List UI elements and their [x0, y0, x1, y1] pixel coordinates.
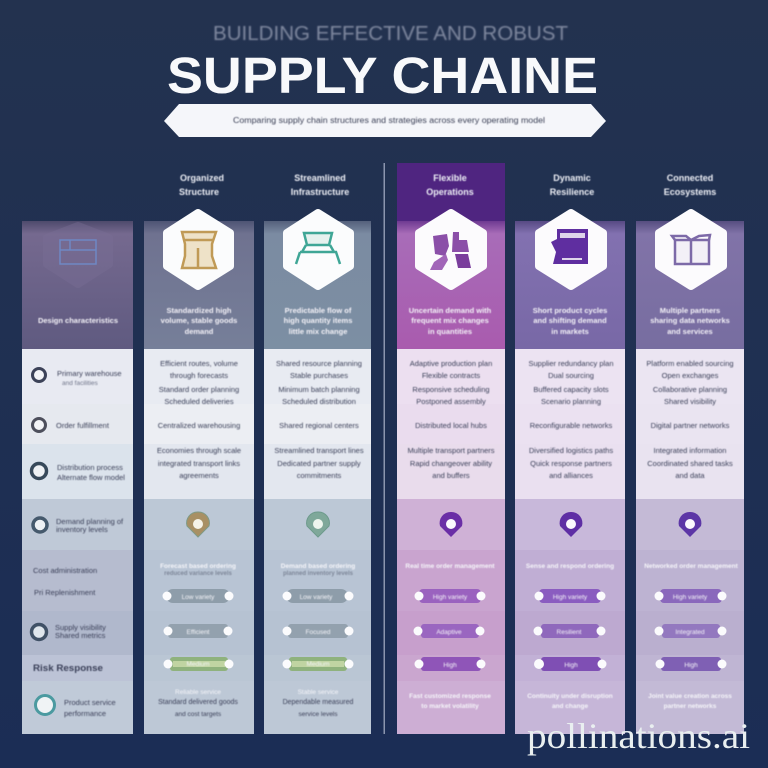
row 4 label: inventory levels: [56, 525, 108, 534]
row 1 text: through forecasts: [170, 371, 228, 380]
icon: puzzle pieces: [430, 232, 471, 270]
row 1 text: Platform enabled sourcing: [646, 359, 734, 368]
header description: Predictable flow of: [285, 306, 351, 315]
column heading: Ecosystems: [664, 187, 716, 197]
pill: row 5: [282, 589, 354, 603]
row 1 text: Shared visibility: [664, 397, 716, 406]
row 5 text: planned inventory levels: [283, 571, 354, 577]
column heading: Infrastructure: [291, 187, 349, 197]
row 1 text: Scenario planning: [541, 397, 601, 406]
header description: Uncertain demand with: [409, 306, 491, 315]
watermark: pollinations.ai: [527, 716, 750, 756]
column: option 5: [636, 173, 744, 734]
row 8 note: and cost targets: [175, 711, 222, 718]
icon: cart: [296, 233, 340, 264]
pill: row 7: [282, 657, 354, 671]
header description: frequent mix changes: [411, 316, 489, 325]
icon: ghost crate: [60, 240, 96, 264]
icon: status marker: [440, 512, 462, 537]
row 5 text: reduced variance levels: [164, 571, 233, 577]
row 1 label: and facilities: [62, 380, 99, 387]
main title: SUPPLY CHAINE: [167, 47, 598, 104]
row 8 text: Fast customized response: [409, 693, 491, 700]
row 1 text: Standard order planning: [159, 385, 239, 394]
row 1 text: Dual sourcing: [548, 371, 594, 380]
header panel: [397, 221, 505, 349]
row 1 text: Supplier redundancy plan: [528, 359, 614, 368]
pill: row 7: [414, 657, 486, 671]
header description: high quantity items: [284, 316, 352, 325]
row 8 label: performance: [64, 709, 106, 718]
row 8 text: partner networks: [664, 703, 717, 710]
header panel: [636, 221, 744, 349]
row 5 text: Real time order management: [405, 563, 495, 570]
pill: row 6: Efficient: [186, 629, 210, 636]
row 5 text: Networked order management: [644, 563, 739, 570]
row 8 text: Continuity under disruption: [527, 693, 613, 700]
pill: row 5: High variety: [553, 594, 588, 601]
pill: row 5: High variety: [673, 594, 708, 601]
row 8 detail: Standard delivered goods: [158, 699, 238, 706]
row 8 detail: Dependable measured: [283, 699, 354, 706]
row 8 text: and change: [552, 703, 588, 710]
icon: status marker: [187, 512, 209, 537]
row 1 text: Scheduled distribution: [282, 397, 356, 406]
header description: Standardized high: [166, 306, 232, 315]
title block: [164, 23, 606, 137]
icon: open box: [672, 235, 710, 264]
column heading: Structure: [179, 187, 219, 197]
icon: row 1: [32, 368, 46, 382]
row 1 text: Collaborative planning: [653, 385, 727, 394]
row 3 text: agreements: [179, 471, 219, 480]
column heading: Flexible: [433, 173, 467, 183]
pill: row 7: [164, 657, 234, 671]
pill: row 6: Adaptive: [436, 629, 462, 636]
header description: Short product cycles: [533, 306, 607, 315]
row 2 text: Distributed local hubs: [415, 421, 487, 430]
pill: row 7: Medium: [186, 661, 210, 668]
subtitle banner: [164, 104, 606, 137]
pill: row 7: Medium: [306, 661, 330, 668]
header description: demand: [185, 327, 214, 336]
rows background: [397, 349, 505, 734]
pill: row 7: High: [443, 662, 457, 669]
row 8 note: service levels: [298, 711, 338, 718]
pill: row 6: [534, 624, 606, 638]
row 1 text: Responsive scheduling: [412, 385, 490, 394]
row 1 text: Flexible contracts: [422, 371, 480, 380]
pill: row 5: [162, 589, 234, 603]
rows background: [22, 349, 133, 734]
row 1 text: Stable purchases: [290, 371, 348, 380]
row 3 text: and buffers: [432, 471, 470, 480]
row 3 text: Multiple transport partners: [407, 446, 495, 455]
pill: row 7: High: [564, 662, 578, 669]
row 1 text: Scheduled deliveries: [164, 397, 234, 406]
header description: sharing data networks: [650, 316, 730, 325]
row 4 label: Demand planning of: [56, 517, 123, 526]
icon: status marker: [679, 512, 701, 537]
ghost hexagon badge: [47, 226, 109, 284]
icon: status marker: [307, 512, 329, 537]
rows background: [636, 349, 744, 734]
row 1 text: Efficient routes, volume: [160, 359, 238, 368]
header description: volume, stable goods: [161, 316, 237, 325]
header panel: [144, 221, 254, 349]
row 2 text: Reconfigurable networks: [530, 421, 613, 430]
icon: crate: [182, 232, 216, 268]
rows background: [144, 349, 254, 734]
row 1 text: Postponed assembly: [416, 397, 486, 406]
row 3 text: Coordinated shared tasks: [647, 459, 733, 468]
pill: row 5: [414, 589, 486, 603]
pill: row 6: [282, 624, 354, 638]
pill: row 5: Low variety: [300, 594, 333, 601]
row 3 text: Dedicated partner supply: [277, 459, 361, 468]
row 8 label: Product service: [64, 698, 116, 707]
row 3 text: integrated transport links: [158, 459, 240, 468]
pill: row 7: [656, 657, 726, 671]
pill: row 6: [654, 624, 726, 638]
row 3 label: Alternate flow model: [57, 473, 125, 482]
header caption: Design characteristics: [38, 316, 118, 325]
row 3 text: Integrated information: [654, 446, 726, 455]
header description: Multiple partners: [660, 306, 720, 315]
row 1 text: Minimum batch planning: [278, 385, 360, 394]
column heading: Operations: [426, 187, 474, 197]
eyebrow heading: BUILDING EFFECTIVE AND ROBUST: [213, 23, 568, 45]
hexagon badge: [287, 213, 350, 286]
column heading: Dynamic: [553, 173, 591, 183]
row 6 label: Shared metrics: [55, 631, 106, 640]
row 2 label: Order fulfillment: [56, 421, 110, 430]
header panel: [515, 221, 625, 349]
header description: little mix change: [289, 327, 347, 336]
icon: row 6: [32, 624, 46, 640]
column: option 3 (highlighted): [397, 163, 505, 734]
center divider: [384, 163, 385, 734]
row 8 text: Reliable service: [175, 689, 221, 696]
row 3 text: and alliances: [549, 471, 593, 480]
pill: row 6: Focused: [306, 629, 331, 636]
pill: row 5: High variety: [433, 594, 468, 601]
pill: row 5: [654, 589, 726, 603]
icon: row 4: [33, 518, 47, 532]
hexagon badge: [659, 213, 723, 286]
row 1 text: Adaptive production plan: [410, 359, 492, 368]
icon: status marker: [560, 512, 582, 537]
row 7 label: Risk Response: [33, 663, 103, 674]
row 3 text: Streamlined transport lines: [274, 446, 364, 455]
icon: row 8: [36, 696, 54, 714]
pill: row 6: [414, 624, 484, 638]
column: option 4: [515, 173, 625, 734]
header description: in markets: [551, 327, 589, 336]
row 8 text: Joint value creation across: [648, 693, 732, 700]
icon: row 3: [32, 464, 46, 478]
row 1 text: Shared resource planning: [276, 359, 362, 368]
row 5 labels: Cost administration: [33, 566, 97, 575]
column heading: Organized: [180, 173, 224, 183]
pill: row 5: [534, 589, 606, 603]
pill: row 6: Resilient: [557, 629, 582, 636]
row 1 label: Primary warehouse: [57, 369, 122, 378]
column heading: Connected: [667, 173, 713, 183]
icon: row 2: [32, 418, 46, 432]
header description: in quantities: [428, 327, 472, 336]
row 2 text: Shared regional centers: [279, 421, 359, 430]
row 1 text: Open exchanges: [662, 371, 719, 380]
heading tab: [397, 163, 505, 221]
row 5 text: Sense and respond ordering: [526, 563, 614, 570]
header description: and shifting demand: [533, 316, 607, 325]
row 3 text: commitments: [297, 471, 342, 480]
header description: and services: [667, 327, 713, 336]
rows background: [264, 349, 371, 734]
subtitle banner: Comparing supply chain structures and strategies across every operating model: [233, 116, 545, 125]
pill: row 7: [534, 657, 606, 671]
row 3 text: Quick response partners: [530, 459, 612, 468]
row 6 label: Supply visibility: [55, 623, 106, 632]
pill: row 7: High: [684, 662, 698, 669]
hexagon badge: [167, 213, 230, 286]
row 3 text: and data: [675, 471, 705, 480]
row 8 text: Stable service: [298, 689, 339, 696]
pill: row 5: Low variety: [182, 594, 215, 601]
row 5 text: Demand based ordering: [281, 563, 355, 570]
hexagon badge: [539, 213, 603, 286]
row 3 text: Economies through scale: [157, 446, 241, 455]
hexagon badge: [419, 213, 483, 286]
column: row labels: [22, 221, 133, 734]
row 2 text: Centralized warehousing: [158, 421, 240, 430]
row 3 text: Diversified logistics paths: [529, 446, 613, 455]
pill: row 6: Integrated: [675, 629, 705, 636]
row 2 text: Digital partner networks: [651, 421, 730, 430]
row 1 text: Buffered capacity slots: [533, 385, 609, 394]
header panel: [264, 221, 371, 349]
pill: row 6: [164, 624, 232, 638]
column: option 2: [264, 173, 371, 734]
row 5 text: Forecast based ordering: [160, 563, 236, 570]
row 3 label: Distribution process: [57, 463, 123, 472]
header panel: [22, 221, 133, 349]
row 8 text: to market volatility: [421, 703, 479, 710]
column heading: Resilience: [550, 187, 594, 197]
icon: document box: [551, 229, 588, 264]
column heading: Streamlined: [294, 173, 346, 183]
row 3 text: Rapid changeover ability: [410, 459, 492, 468]
column: option 1: [144, 173, 254, 734]
rows background: [515, 349, 625, 734]
row 5 labels: Pri Replenishment: [34, 588, 96, 597]
